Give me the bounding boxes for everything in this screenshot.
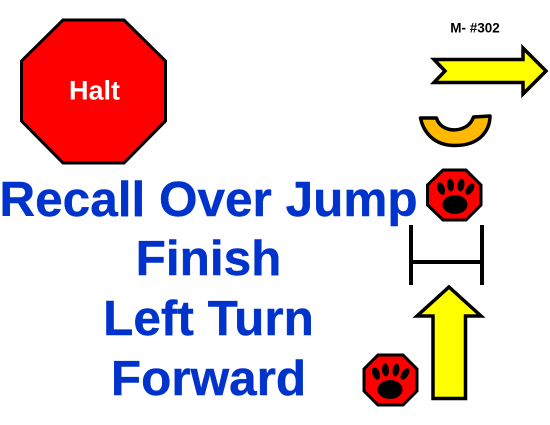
icon: finish arc bbox=[420, 116, 490, 146]
icon: recall over jump hurdle bbox=[411, 225, 482, 285]
icon: forward arrow bbox=[417, 287, 481, 398]
text: Forward: Forward bbox=[111, 351, 306, 406]
icon: right arrow bbox=[434, 48, 546, 94]
label: M- #302: M- #302 bbox=[450, 20, 500, 36]
icon: paw sign lower bbox=[364, 355, 417, 405]
text: Recall Over Jump: Recall Over Jump bbox=[0, 172, 418, 227]
icon: halt stop sign: Halt bbox=[69, 76, 120, 106]
text: Finish: Finish bbox=[136, 231, 281, 286]
icon: halt stop sign bbox=[22, 20, 166, 163]
icon: paw sign upper bbox=[428, 170, 481, 220]
heading: exercise list bbox=[0, 172, 418, 406]
text: Left Turn: Left Turn bbox=[103, 291, 314, 346]
